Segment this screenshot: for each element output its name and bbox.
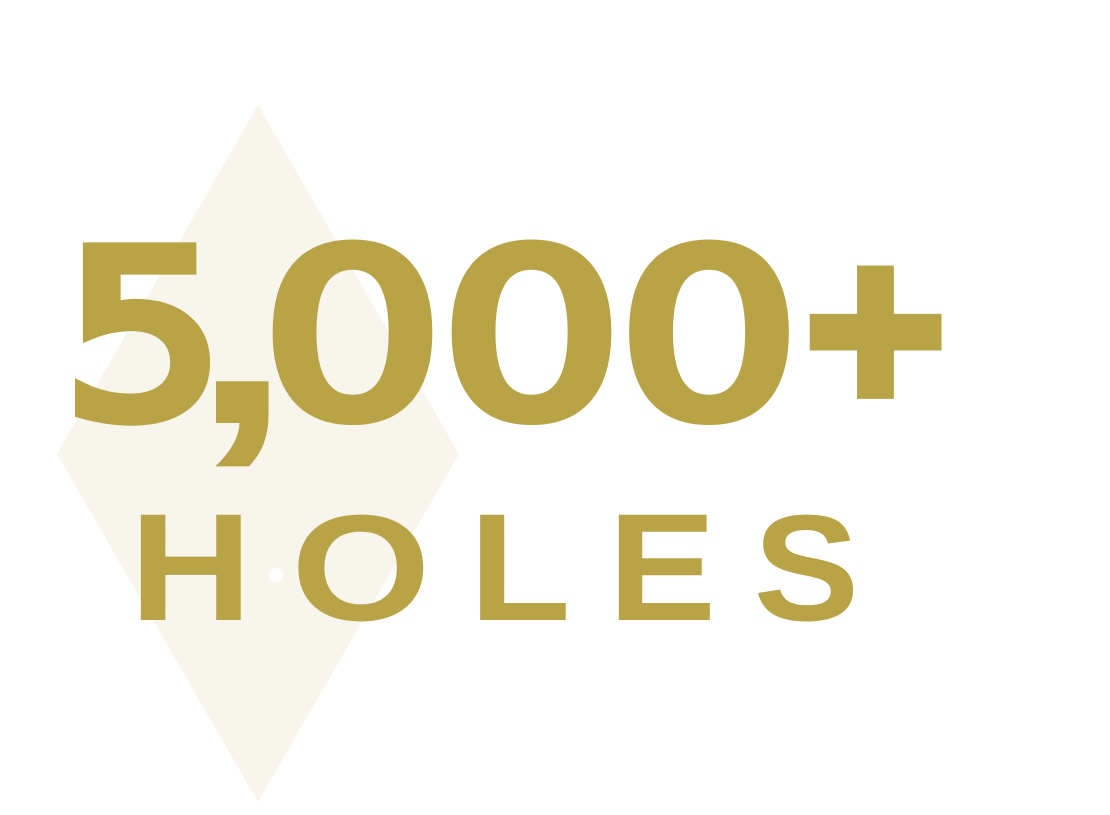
white dot <box>269 568 283 582</box>
label: HOLES: E <box>608 482 716 653</box>
headline number: 5,000+ <box>63 170 946 482</box>
label: HOLES <box>130 481 859 653</box>
headline number: 5,000+: 0 <box>440 204 623 470</box>
label: HOLES: H <box>130 483 252 653</box>
headline number: 5,000+: 5 <box>63 204 225 471</box>
label: HOLES: L <box>469 481 571 653</box>
label: HOLES: O <box>291 484 431 653</box>
headline number: 5,000+: , <box>190 170 293 482</box>
headline number: 5,000+: 0 <box>262 204 444 470</box>
headline number: 5,000+: + <box>804 194 946 465</box>
background diamond <box>57 105 459 802</box>
headline number: 5,000+: 0 <box>618 204 800 470</box>
label: HOLES: S <box>754 483 859 652</box>
